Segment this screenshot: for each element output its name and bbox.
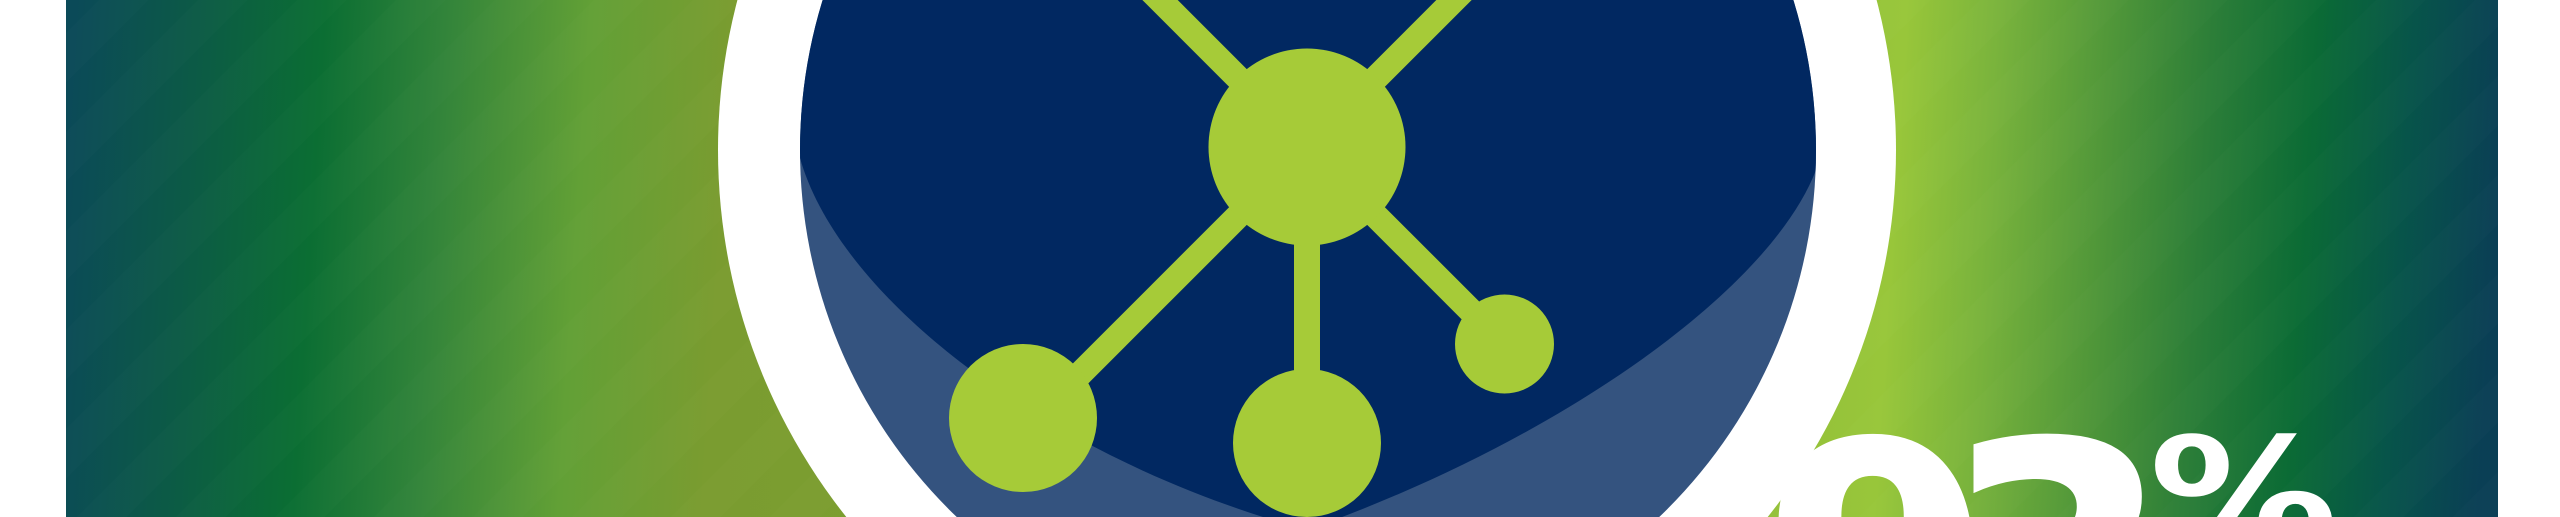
badge disc (790, 0, 1830, 517)
white ring around disc (718, 0, 1896, 517)
icon: network of nodes (949, 0, 1554, 517)
statistic: 93 percent (1763, 374, 2338, 517)
